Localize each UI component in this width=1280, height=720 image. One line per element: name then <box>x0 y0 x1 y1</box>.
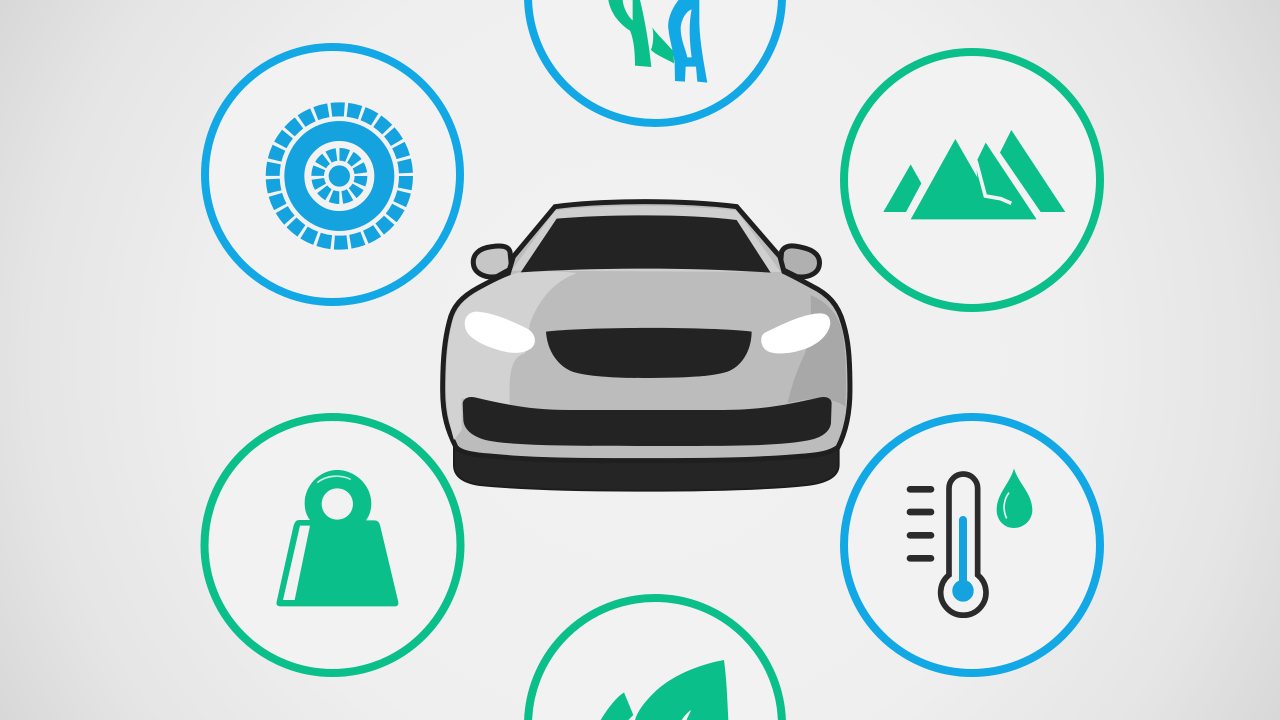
circle: bottom leaf <box>528 598 782 720</box>
icon: tire <box>273 109 406 243</box>
right headlight <box>761 313 830 353</box>
left headlight <box>465 312 535 353</box>
right mirror <box>780 246 819 277</box>
car body <box>443 202 850 461</box>
car <box>443 202 850 491</box>
icon: weight <box>276 470 398 606</box>
circle: weight <box>204 417 460 673</box>
circle: mountains <box>844 52 1100 308</box>
car underbody <box>454 443 839 491</box>
icon: mountains <box>883 130 1065 219</box>
lower bumper intake <box>463 397 832 446</box>
icon: thermometer and drop <box>910 468 1032 615</box>
circle: temperature and humidity <box>844 417 1100 673</box>
windshield <box>521 215 771 273</box>
windshield frame <box>512 206 781 272</box>
icon: road grip shapes <box>608 0 707 83</box>
icon: leaf <box>601 660 728 720</box>
grille <box>546 328 752 378</box>
circle: tire <box>205 47 460 302</box>
left mirror <box>473 246 512 277</box>
circle: top road grip icon <box>528 0 782 123</box>
left light body panel <box>446 271 577 440</box>
right shadow panel <box>787 295 846 407</box>
